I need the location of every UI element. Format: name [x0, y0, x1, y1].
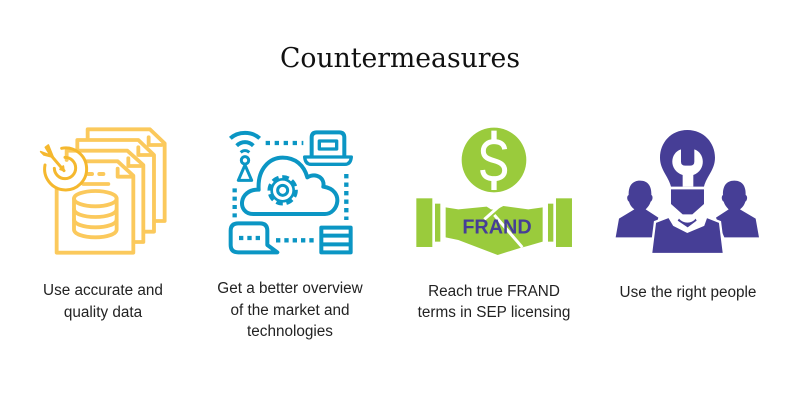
FRAND label: FRAND: [462, 216, 532, 239]
dollar coin: [462, 128, 526, 192]
right person: [716, 181, 759, 237]
cloud with gear: [242, 158, 337, 214]
caption: FRAND terms: Reach true FRAND: [428, 283, 560, 300]
wifi and tower: [230, 133, 260, 180]
caption: market overview: of the market and: [230, 302, 350, 318]
caption: FRAND terms: terms in SEP licensing: [418, 304, 570, 320]
icon: documents with database and target: [41, 129, 165, 253]
dotted connectors: [235, 143, 346, 240]
title: Countermeasures: [280, 43, 520, 74]
icon: FRAND handshake with dollar coin: [416, 128, 572, 255]
caption: FRAND terms: [418, 283, 570, 320]
caption: right people: Use the right people: [620, 284, 756, 301]
caption: accurate data: quality data: [64, 304, 142, 320]
center person: [651, 217, 724, 254]
icon: people with wrench lightbulb: [616, 130, 759, 254]
caption: market overview: Get a better overview: [217, 280, 363, 297]
caption: market overview: technologies: [247, 323, 333, 340]
caption: market overview: [217, 280, 363, 340]
left person: [616, 181, 658, 237]
icon: cloud network: [230, 132, 351, 252]
icon: target with arrow: [41, 145, 87, 190]
data table: [321, 228, 351, 252]
caption: accurate data: Use accurate and: [43, 282, 163, 299]
laptop: [305, 132, 351, 164]
caption: accurate data: [43, 282, 163, 320]
lightbulb with wrench: [660, 130, 715, 214]
handshake: [416, 198, 572, 255]
chat bubble: [231, 223, 277, 252]
